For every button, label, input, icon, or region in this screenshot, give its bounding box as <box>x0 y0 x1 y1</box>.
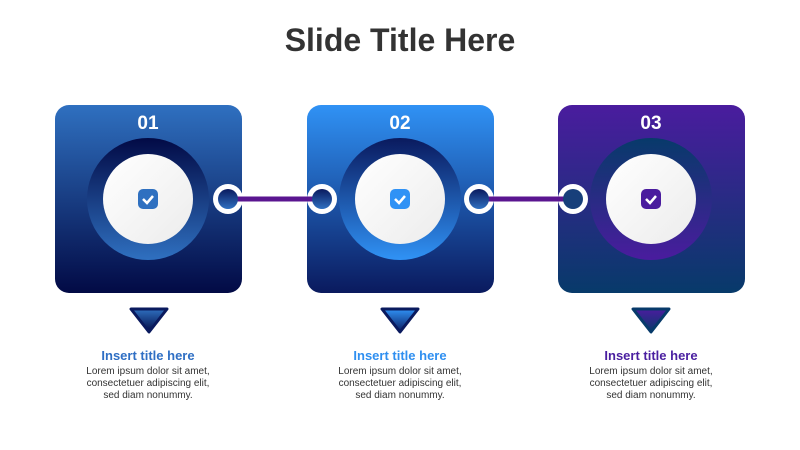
card 2 <box>307 105 494 293</box>
text 3: Insert title here <box>604 348 698 363</box>
card 1 <box>55 105 242 293</box>
text 3 <box>589 348 713 401</box>
text 2: consectetuer adipiscing elit, <box>339 378 461 389</box>
text 3: sed diam nonummy. <box>606 390 696 401</box>
text 3: consectetuer adipiscing elit, <box>590 378 712 389</box>
text 1: sed diam nonummy. <box>103 390 193 401</box>
text 2: Lorem ipsum dolor sit amet, <box>338 366 462 377</box>
text 2: Insert title here <box>353 348 447 363</box>
text 1: Insert title here <box>101 348 195 363</box>
connectors <box>213 184 588 214</box>
text 3: Lorem ipsum dolor sit amet, <box>589 366 713 377</box>
text 2 <box>338 348 462 401</box>
text 1: consectetuer adipiscing elit, <box>87 378 209 389</box>
card 3 <box>558 105 745 293</box>
card 1: 01 <box>137 113 159 134</box>
card 3: 03 <box>640 113 662 134</box>
text 1: Lorem ipsum dolor sit amet, <box>86 366 210 377</box>
arrows <box>131 309 669 332</box>
title: Slide Title Here <box>285 22 515 58</box>
text 2: sed diam nonummy. <box>355 390 445 401</box>
text 1 <box>86 348 210 401</box>
card 2: 02 <box>389 113 411 134</box>
